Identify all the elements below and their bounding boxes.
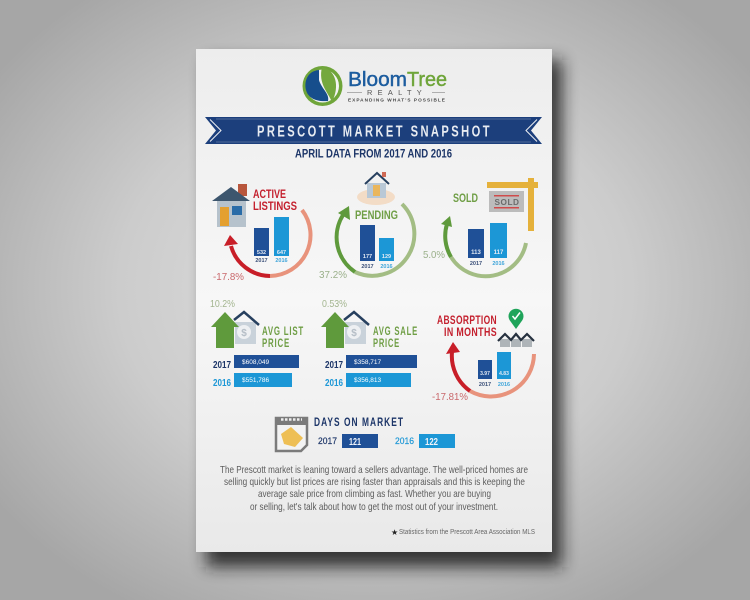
icon: sold sign: SOLD <box>494 198 520 207</box>
panel: absorption in months: IN MONTHS <box>444 327 497 339</box>
percent change: 5.0% <box>423 249 445 261</box>
panel: avg sale price <box>321 298 418 389</box>
summary paragraph: selling quickly but list prices are rising faster than appraisals and this is keeping the <box>224 476 525 488</box>
subtitle: APRIL DATA FROM 2017 AND 2016 <box>295 146 452 160</box>
bar chart: 2016 <box>213 378 231 389</box>
bar chart: 2017 <box>325 360 343 371</box>
bar chart: 2017 <box>213 360 231 371</box>
heading: PENDING <box>355 208 398 222</box>
bar chart: 2016 <box>325 378 343 389</box>
bar chart <box>468 223 507 267</box>
logo: REALTY <box>367 90 427 97</box>
days 2017: 2017 <box>318 436 337 447</box>
bar chart: 2016 <box>498 382 510 388</box>
percent change: 0.53% <box>322 298 347 310</box>
panel: avg list price: PRICE <box>262 336 290 350</box>
bar chart: 2017 <box>361 264 374 270</box>
heading: ACTIVE <box>253 187 286 201</box>
bar chart <box>325 355 417 389</box>
icon: location pin <box>508 309 524 329</box>
icon: house <box>212 184 250 227</box>
bar chart <box>254 217 289 264</box>
logo: Tree <box>407 69 447 91</box>
change arc <box>446 342 534 396</box>
bar chart: 177 <box>363 254 372 260</box>
logo wordmark: Bloom <box>348 69 407 91</box>
bar chart <box>478 352 511 388</box>
bar chart: 4.83 <box>499 371 509 377</box>
percent change: -17.81% <box>432 391 468 403</box>
heading: DAYS ON MARKET <box>314 415 404 429</box>
heading: ABSORPTION <box>437 315 497 327</box>
days 2016 <box>395 434 455 448</box>
bar chart: 129 <box>382 254 391 260</box>
percent change: -17.8% <box>213 271 244 283</box>
bar chart: 2017 <box>255 258 268 264</box>
logo <box>302 66 447 106</box>
bar chart: $358,717 <box>354 359 381 366</box>
title banner: PRESCOTT MARKET SNAPSHOT <box>257 124 492 140</box>
panel: sold <box>423 178 538 276</box>
panel: avg list price <box>210 298 304 389</box>
change arc <box>337 204 414 276</box>
footnote: Statistics from the Prescott Area Association MLS <box>399 529 535 536</box>
change arc <box>441 216 526 276</box>
summary paragraph: or selling, let's talk about how to get the most out of your investment. <box>250 501 498 513</box>
change arc <box>224 210 311 276</box>
panel: days on market <box>275 415 455 451</box>
summary paragraph: average sale price from climbing as fast. Whether you are buying <box>258 488 491 500</box>
bar chart: 2016 <box>492 261 505 267</box>
heading: AVG LIST <box>262 324 304 338</box>
bar chart: 532 <box>257 250 266 256</box>
icon: calendar with tag <box>275 417 308 451</box>
bar chart <box>360 225 394 270</box>
icon: house in hand <box>357 172 395 205</box>
bar chart <box>213 355 299 389</box>
bar chart: 2016 <box>275 258 288 264</box>
panel: pending <box>319 172 414 281</box>
percent change: 10.2% <box>210 298 235 310</box>
bar chart: $551,786 <box>242 377 269 384</box>
days 2016: 122 <box>425 437 438 448</box>
icon: up arrow and house: $ <box>241 328 247 339</box>
bar chart: 3.97 <box>480 371 490 377</box>
summary paragraph <box>220 464 528 513</box>
panel: absorption in months <box>432 309 534 403</box>
bar chart: $356,813 <box>354 377 381 384</box>
footnote: ★ <box>391 528 398 537</box>
icon: row of houses <box>498 334 534 347</box>
days 2017 <box>318 434 378 448</box>
days 2016: 2016 <box>395 436 414 447</box>
paper sheet <box>196 49 552 552</box>
percent change: 37.2% <box>319 269 347 281</box>
bar chart: 2017 <box>470 261 482 267</box>
heading: AVG SALE <box>373 324 418 338</box>
panel: avg sale price: PRICE <box>373 336 400 350</box>
bar chart: 647 <box>277 250 286 256</box>
logo: EXPANDING WHAT'S POSSIBLE <box>348 98 446 102</box>
title banner <box>205 117 542 144</box>
days 2017: 121 <box>349 437 361 448</box>
footnote <box>391 528 535 537</box>
paper shadow <box>206 60 562 567</box>
panel: active listings <box>212 184 311 283</box>
icon: up arrow and house: $ <box>351 328 357 339</box>
logo mark <box>302 66 342 106</box>
bar chart: 113 <box>471 250 481 256</box>
bar chart: $608,049 <box>242 359 269 366</box>
summary paragraph: The Prescott market is leaning toward a sellers advantage. The well-priced homes are <box>220 464 528 476</box>
bar chart: 2016 <box>380 264 393 270</box>
heading: SOLD <box>453 193 478 205</box>
panel: active listings: LISTINGS <box>253 199 297 213</box>
bar chart: 2017 <box>479 382 491 388</box>
bar chart: 117 <box>494 250 504 256</box>
